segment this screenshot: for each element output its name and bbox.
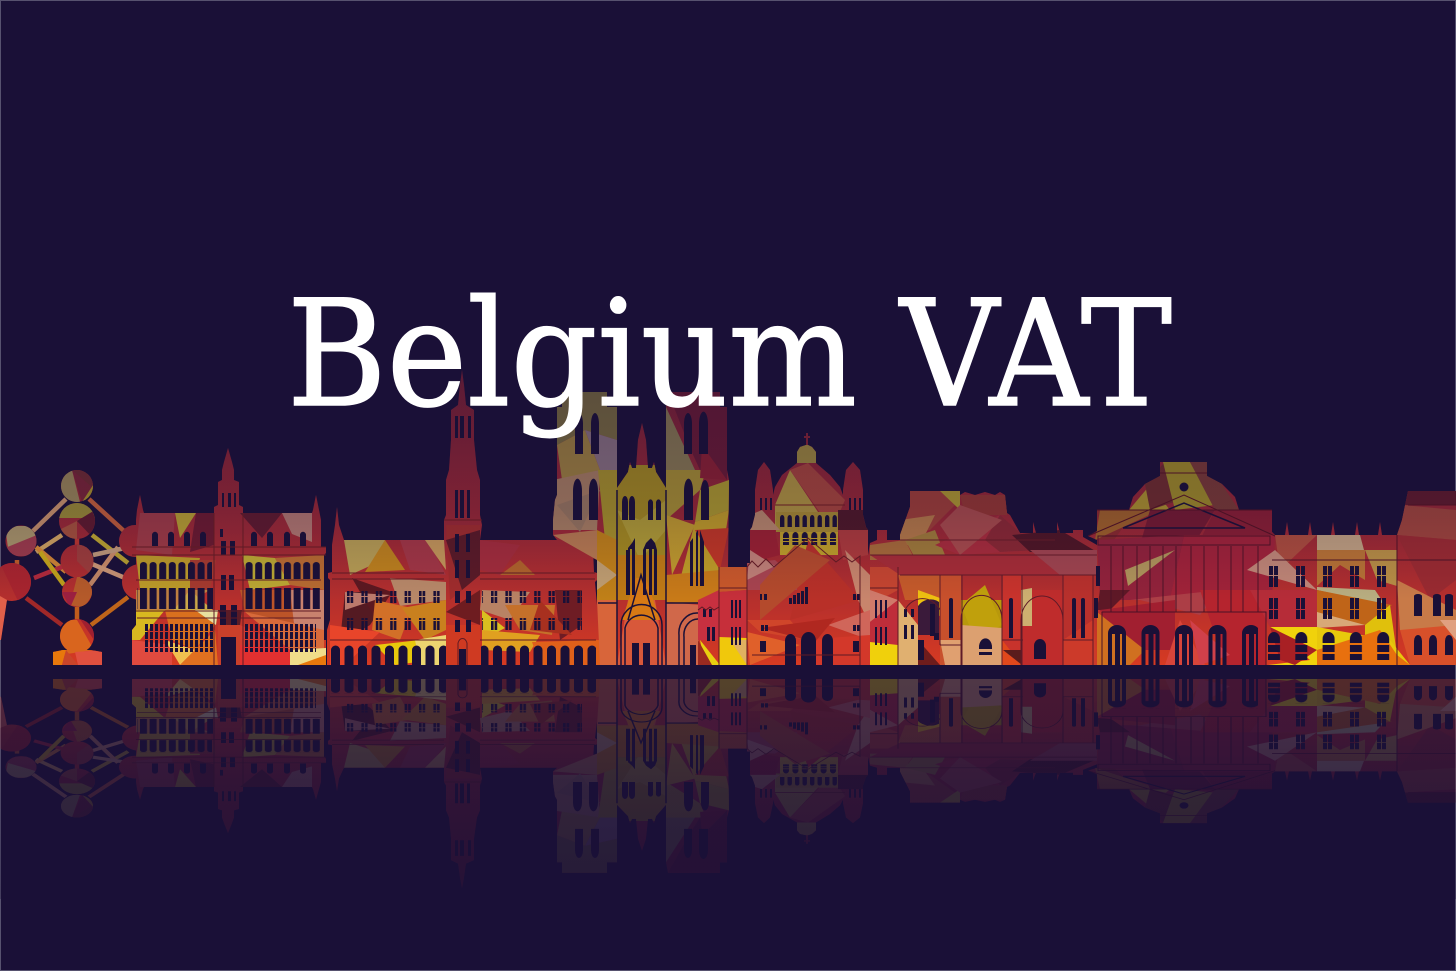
icon: Atomium struts xyxy=(17,499,128,625)
triumphal arch openings xyxy=(870,540,1097,665)
row house windows xyxy=(1268,505,1456,665)
cathedral windows and portal xyxy=(573,412,709,665)
basilica windows and doors xyxy=(698,498,914,665)
cathedral facets xyxy=(557,392,617,445)
title xyxy=(287,269,1172,440)
guild hall facets xyxy=(344,540,385,575)
title: Belgium xyxy=(287,269,857,440)
palace columns, windows and pediment xyxy=(1088,473,1275,665)
basilica facets xyxy=(775,470,830,530)
palace facets xyxy=(1129,485,1170,510)
reflection fade overlay xyxy=(0,679,1456,899)
title: VAT xyxy=(898,269,1172,440)
town hall facets xyxy=(136,513,175,555)
low-poly colour fill clipped to building silhouettes xyxy=(0,370,1456,670)
low-poly Brussels skyline xyxy=(0,370,1456,670)
row houses facets xyxy=(1275,535,1317,562)
town hall windows xyxy=(132,493,326,665)
triumphal arch facets xyxy=(900,491,954,534)
guild hall windows and arcade xyxy=(330,416,596,665)
atomium facets xyxy=(60,470,80,502)
skyline reflection in water xyxy=(0,675,1456,888)
